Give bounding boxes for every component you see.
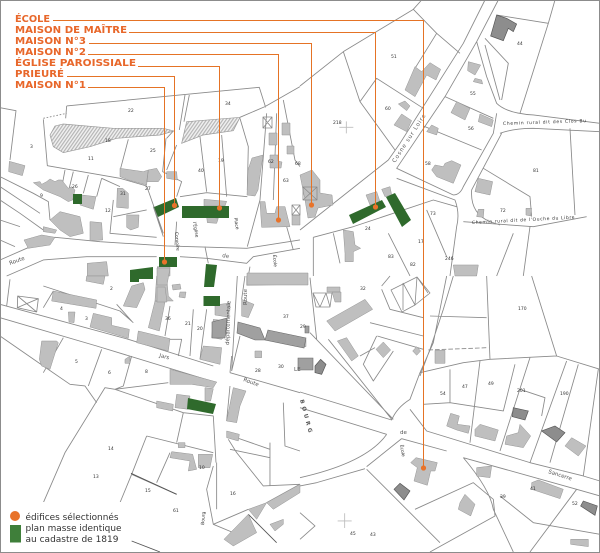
map lettering and parcel numbers: de xyxy=(400,430,407,436)
map lettering and parcel numbers: Jars xyxy=(158,353,170,361)
map lettering and parcel numbers: LE xyxy=(294,367,301,373)
map lettering and parcel numbers: Route xyxy=(242,377,260,389)
map lettering and parcel numbers: Route xyxy=(243,288,249,305)
map lettering and parcel numbers: 34 xyxy=(225,101,231,107)
map lettering and parcel numbers: 3 xyxy=(85,316,88,322)
leader line: école xyxy=(53,20,424,468)
building name labels: PRIEURÉ xyxy=(15,67,64,80)
map lettering and parcel numbers: 83 xyxy=(388,254,394,260)
map lettering and parcel numbers: 16 xyxy=(230,491,236,497)
legend background xyxy=(5,502,125,550)
map lettering and parcel numbers: 40 xyxy=(198,168,204,174)
parcels and roads, north-east xyxy=(300,0,600,276)
map lettering and parcel numbers: Sancerre xyxy=(547,469,573,483)
map lettering and parcel numbers: 31 xyxy=(120,191,126,197)
parcels and roads, south-east xyxy=(300,276,600,552)
map lettering and parcel numbers: 44 xyxy=(517,41,523,47)
green footprints: plan identical to the 1819 cadastre xyxy=(73,193,411,414)
legend label: identical plan: plan masse identique xyxy=(26,524,122,534)
leader line: église paroissiale xyxy=(138,66,220,208)
parcel and frame lines in the dense core xyxy=(263,117,430,312)
map lettering and parcel numbers: 19 xyxy=(218,158,224,164)
map lettering and parcel numbers: 72 xyxy=(500,208,506,214)
map lettering and parcel numbers: Place xyxy=(232,217,240,230)
map lettering and parcel numbers: 13 xyxy=(93,474,99,480)
map lettering and parcel numbers: Corvoire xyxy=(173,232,181,251)
map lettering and parcel numbers: de xyxy=(222,253,230,260)
building name labels xyxy=(15,12,136,91)
map lettering and parcel numbers: 12 xyxy=(105,208,111,214)
map lettering and parcel numbers: 20 xyxy=(197,326,203,332)
map lettering and parcel numbers: 29 xyxy=(300,324,306,330)
map lettering and parcel numbers: 51 xyxy=(391,54,397,60)
map lettering and parcel numbers: 43 xyxy=(370,532,376,538)
map lettering and parcel numbers: 54 xyxy=(440,391,446,397)
map lettering and parcel numbers: 14 xyxy=(108,446,114,452)
map lettering and parcel numbers: 201 xyxy=(517,388,526,394)
map lettering and parcel numbers: Chemin rural dit des Clos Bu xyxy=(503,118,587,127)
leader line: maison n°3 xyxy=(89,44,312,205)
darker hatched row xyxy=(212,318,313,370)
map lettering and parcel numbers: 62 xyxy=(268,159,274,165)
map lettering and parcel numbers: 25 xyxy=(150,148,156,154)
footprint: central block xyxy=(204,264,217,287)
map lettering and parcel numbers: 39 xyxy=(500,494,506,500)
map lettering and parcel numbers: 21 xyxy=(185,321,191,327)
north cluster buildings xyxy=(247,123,333,225)
building name labels: MAISON N°3 xyxy=(15,36,86,47)
map lettering and parcel numbers: 190 xyxy=(560,391,569,397)
map lettering and parcel numbers: 4 xyxy=(60,306,63,312)
map lettering and parcel numbers: 55 xyxy=(470,91,476,97)
footprint: west house xyxy=(73,194,82,204)
map lettering and parcel numbers: 9 xyxy=(40,193,43,199)
leader line: maison n°2 xyxy=(88,54,278,220)
map lettering and parcel numbers: 82 xyxy=(410,262,416,268)
map lettering and parcel numbers: 36 xyxy=(165,316,171,322)
map lettering and parcel numbers: 58 xyxy=(425,161,431,167)
legend label: 1819 cadastre: au cadastre de 1819 xyxy=(26,535,119,545)
map lettering and parcel numbers: 37 xyxy=(283,314,289,320)
map lettering and parcel numbers: 6 xyxy=(108,370,111,376)
map lettering and parcel numbers: Route xyxy=(9,256,26,267)
map lettering and parcel numbers: 63 xyxy=(283,178,289,184)
map lettering and parcel numbers: 45 xyxy=(350,531,356,537)
building name labels: ÉGLISE PAROISSIALE xyxy=(15,56,136,69)
map lettering and parcel numbers: 10 xyxy=(199,465,205,471)
central hatched building band xyxy=(247,273,308,285)
map lettering and parcel numbers: 22 xyxy=(128,108,134,114)
parcels and roads, north-west xyxy=(0,87,300,276)
map lettering and parcel numbers: 73 xyxy=(430,211,436,217)
leader line: maison de maître xyxy=(129,32,376,207)
building name labels: MAISON DE MAÎTRE xyxy=(15,23,127,36)
parcels and roads, south-west xyxy=(0,276,300,552)
map lettering and parcel numbers: 170 xyxy=(518,306,527,312)
map lettering and parcel numbers: 68 xyxy=(295,161,301,167)
building name labels: ÉCOLE xyxy=(15,12,50,25)
footprint: maison n°1 xyxy=(159,257,177,267)
legend icon: green square xyxy=(10,525,21,542)
map lettering and parcel numbers: 11 xyxy=(88,156,94,162)
footprint: south block xyxy=(187,398,216,414)
map lettering and parcel numbers: École xyxy=(398,444,408,457)
map lettering and parcel numbers: 61 xyxy=(173,508,179,514)
map lettering and parcel numbers: 3 xyxy=(30,144,33,150)
map lettering and parcel numbers: 5 xyxy=(75,359,78,365)
footprint: église paroissiale xyxy=(182,206,229,218)
map lettering and parcel numbers: BOURG xyxy=(298,399,313,436)
map lettering and parcel numbers: 32 xyxy=(360,286,366,292)
map lettering and parcel numbers: 30 xyxy=(278,364,284,370)
building name labels: MAISON N°1 xyxy=(15,80,86,91)
leader line: prieuré xyxy=(67,76,174,205)
map lettering and parcel numbers: École xyxy=(271,254,280,267)
map lettering and parcel numbers: l'Église xyxy=(191,221,202,238)
map lettering and parcel numbers: 47 xyxy=(462,384,468,390)
footprint: block south of road xyxy=(130,267,153,282)
footprint: prieuré xyxy=(154,198,179,217)
map lettering and parcel numbers: 218 xyxy=(333,120,342,126)
leader line: maison n°1 xyxy=(88,88,164,262)
map lettering and parcel numbers: 24 xyxy=(365,226,371,232)
map lettering and parcel numbers: 26 xyxy=(72,184,78,190)
map lettering and parcel numbers: 15 xyxy=(145,488,151,494)
map lettering and parcel numbers: 41 xyxy=(530,486,536,492)
map lettering and parcel numbers: 2 xyxy=(110,286,113,292)
map lettering and parcel numbers: 28 xyxy=(255,368,261,374)
dense village buildings xyxy=(157,117,430,370)
footprint: maison de maître xyxy=(349,200,386,224)
map lettering and parcel numbers: départementale xyxy=(224,300,233,345)
legend icon: orange dot xyxy=(10,511,20,521)
building name labels: MAISON N°2 xyxy=(15,47,86,58)
map lettering and parcel numbers: 52 xyxy=(572,501,578,507)
legend label: selected buildings: édifices sélectionnés xyxy=(26,512,119,523)
legend xyxy=(5,502,125,550)
map lettering and parcel numbers: 27 xyxy=(145,186,151,192)
central road buildings xyxy=(157,268,341,317)
map lettering and parcel numbers: 246 xyxy=(445,256,454,262)
markers: selected buildings xyxy=(162,202,426,471)
map lettering and parcel numbers: 60 xyxy=(385,106,391,112)
map lettering and parcel numbers: Chemin rural dit de l'Ouche du Libre xyxy=(472,215,575,226)
footprint: central small block xyxy=(204,296,220,306)
map lettering and parcel numbers: 17 xyxy=(418,239,424,245)
map lettering and parcel numbers: Cosne sur Loire xyxy=(392,113,428,164)
map lettering and parcel numbers: Bourg xyxy=(200,511,207,525)
map lettering and parcel numbers: 49 xyxy=(488,381,494,387)
map lettering and parcel numbers: 8 xyxy=(145,369,148,375)
footprint: maison de maître annex xyxy=(386,193,411,227)
map lettering and parcel numbers: 56 xyxy=(468,126,474,132)
map lettering and parcel numbers: 18 xyxy=(105,138,111,144)
map lettering and parcel numbers: 81 xyxy=(533,168,539,174)
